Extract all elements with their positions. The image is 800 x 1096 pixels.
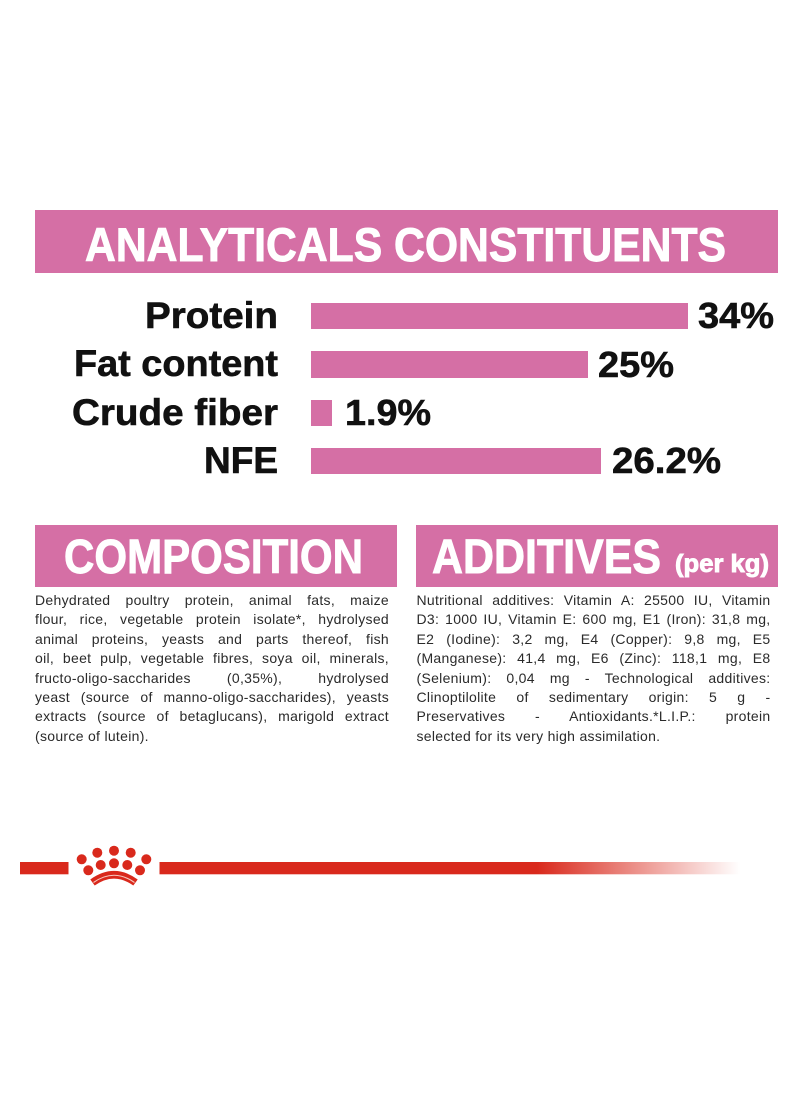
composition text block: oil, beet pulp, vegetable fibres, soya oil, minerals,	[35, 650, 389, 666]
composition text block: Dehydrated poultry protein, animal fats, maize	[35, 592, 389, 608]
row: protein 34%: Protein	[145, 295, 278, 336]
additives text block: Preservatives - Antioxidants.*L.I.P.: protein	[416, 708, 770, 724]
row: protein 34%: 34%	[698, 295, 774, 336]
row: crude fiber 1.9%	[72, 392, 431, 433]
row: NFE 26.2%: NFE	[204, 440, 278, 481]
row: NFE 26.2%: 26.2%	[612, 440, 721, 481]
composition text block: extracts (source of betaglucans), marigold extract	[35, 708, 389, 724]
bar chart: nutrient percentages	[72, 295, 774, 481]
composition text block: yeast (source of manno-oligo-saccharides), yeasts	[35, 689, 389, 705]
row: crude fiber 1.9%: 1.9%	[345, 392, 431, 433]
composition text block	[35, 592, 389, 744]
additives text block: Clinoptilolite of sedimentary origin: 5 g -	[416, 689, 770, 705]
additives text block: Nutritional additives: Vitamin A: 25500 IU, Vitamin	[416, 592, 770, 608]
main banner: analyticals constituents: ANALYTICALS CONSTITUENTS	[85, 218, 726, 271]
composition text block: flour, rice, vegetable protein isolate*, hydrolysed	[35, 611, 389, 627]
additives text block: D3: 1000 IU, Vitamin E: 600 mg, E1 (Iron): 31,8 mg,	[416, 611, 770, 627]
additives text block: E2 (Iodine): 3,2 mg, E4 (Copper): 9,8 mg, E5	[416, 631, 770, 647]
row: crude fiber 1.9%: Crude fiber	[72, 392, 278, 433]
additives heading: (per kg)	[675, 550, 769, 578]
composition text block: animal proteins, yeasts and parts thereof, fish	[35, 631, 389, 647]
additives heading: ADDITIVES	[432, 531, 661, 584]
composition text block: fructo-oligo-saccharides (0,35%), hydrolysed	[35, 670, 389, 686]
icon: royal crown	[77, 846, 151, 882]
additives text block: (Selenium): 0,04 mg - Technological additives:	[416, 670, 770, 686]
row: fat content 25%: Fat content	[74, 343, 278, 384]
additives heading	[416, 525, 778, 587]
composition heading: COMPOSITION	[64, 531, 363, 584]
row: NFE 26.2%	[204, 440, 721, 481]
composition text block: (source of lutein).	[35, 728, 149, 744]
additives text block: selected for its very high assimilation.	[416, 728, 660, 744]
additives text block: (Manganese): 41,4 mg, E6 (Zinc): 118,1 mg, E8	[416, 650, 770, 666]
row: fat content 25%	[74, 343, 674, 385]
footer logo band	[20, 846, 740, 882]
row: fat content 25%: 25%	[598, 344, 674, 385]
row: protein 34%	[145, 295, 774, 336]
additives text block	[416, 592, 770, 744]
